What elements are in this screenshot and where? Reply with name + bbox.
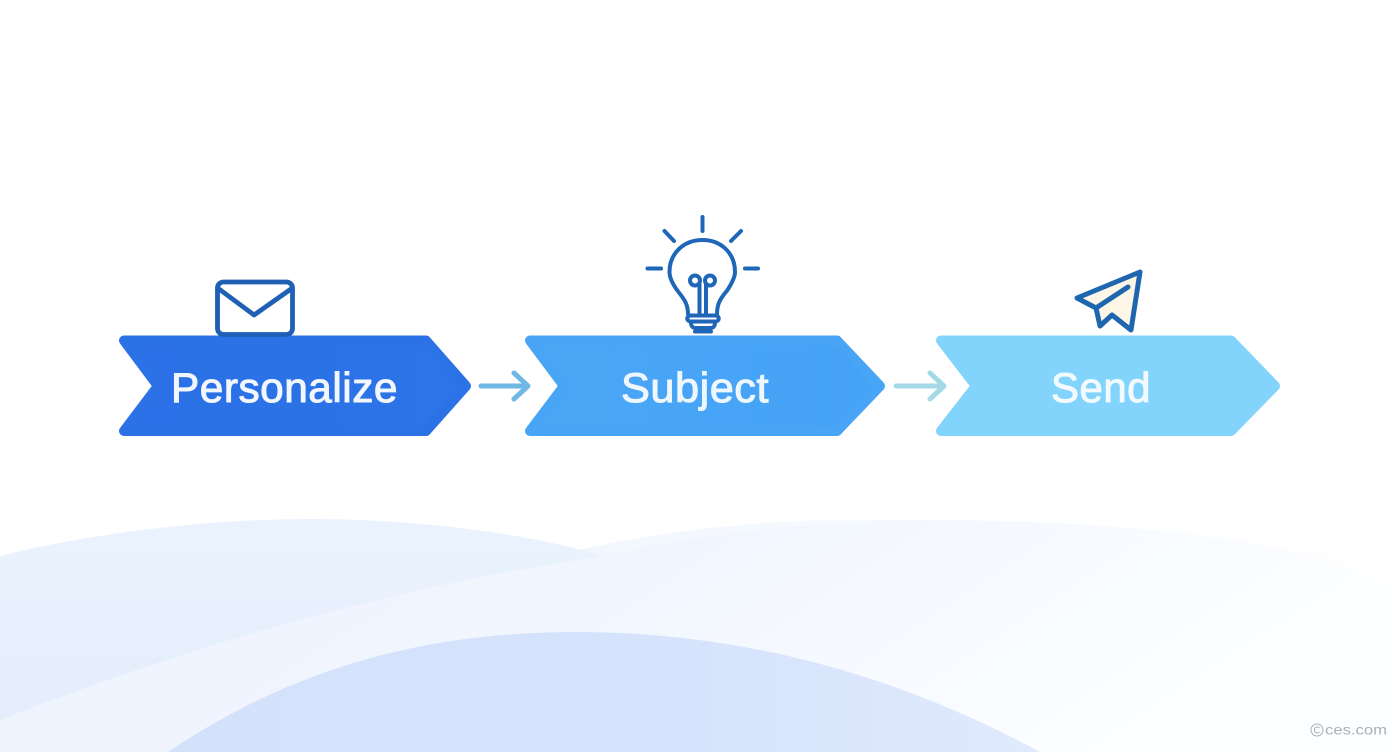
arrow 2: [896, 373, 944, 399]
label: Send: Send: [1051, 364, 1151, 411]
watermark text: ces.com: [1325, 722, 1387, 738]
icon: envelope: [218, 282, 292, 334]
step 2: Subject: [530, 217, 880, 431]
arrow 1: [481, 373, 528, 399]
wave: back right: [440, 519, 1392, 752]
label: Personalize: Personalize: [171, 364, 398, 411]
copyright mark: [1311, 724, 1323, 736]
label: Subject: Subject: [621, 364, 769, 411]
wave: left: [0, 519, 604, 726]
icon: light bulb: [648, 217, 758, 332]
chevron 3: [941, 340, 1275, 431]
background waves: [0, 519, 1392, 752]
watermark: [1311, 722, 1387, 738]
chevron 1: [124, 340, 466, 431]
wave: front: [0, 520, 1392, 752]
step 3: Send: [941, 272, 1275, 431]
icon: paper plane: [1077, 272, 1140, 330]
step 1: Personalize: [124, 282, 466, 431]
wave: bottom centre: [168, 632, 1040, 752]
chevron 2: [530, 340, 880, 431]
